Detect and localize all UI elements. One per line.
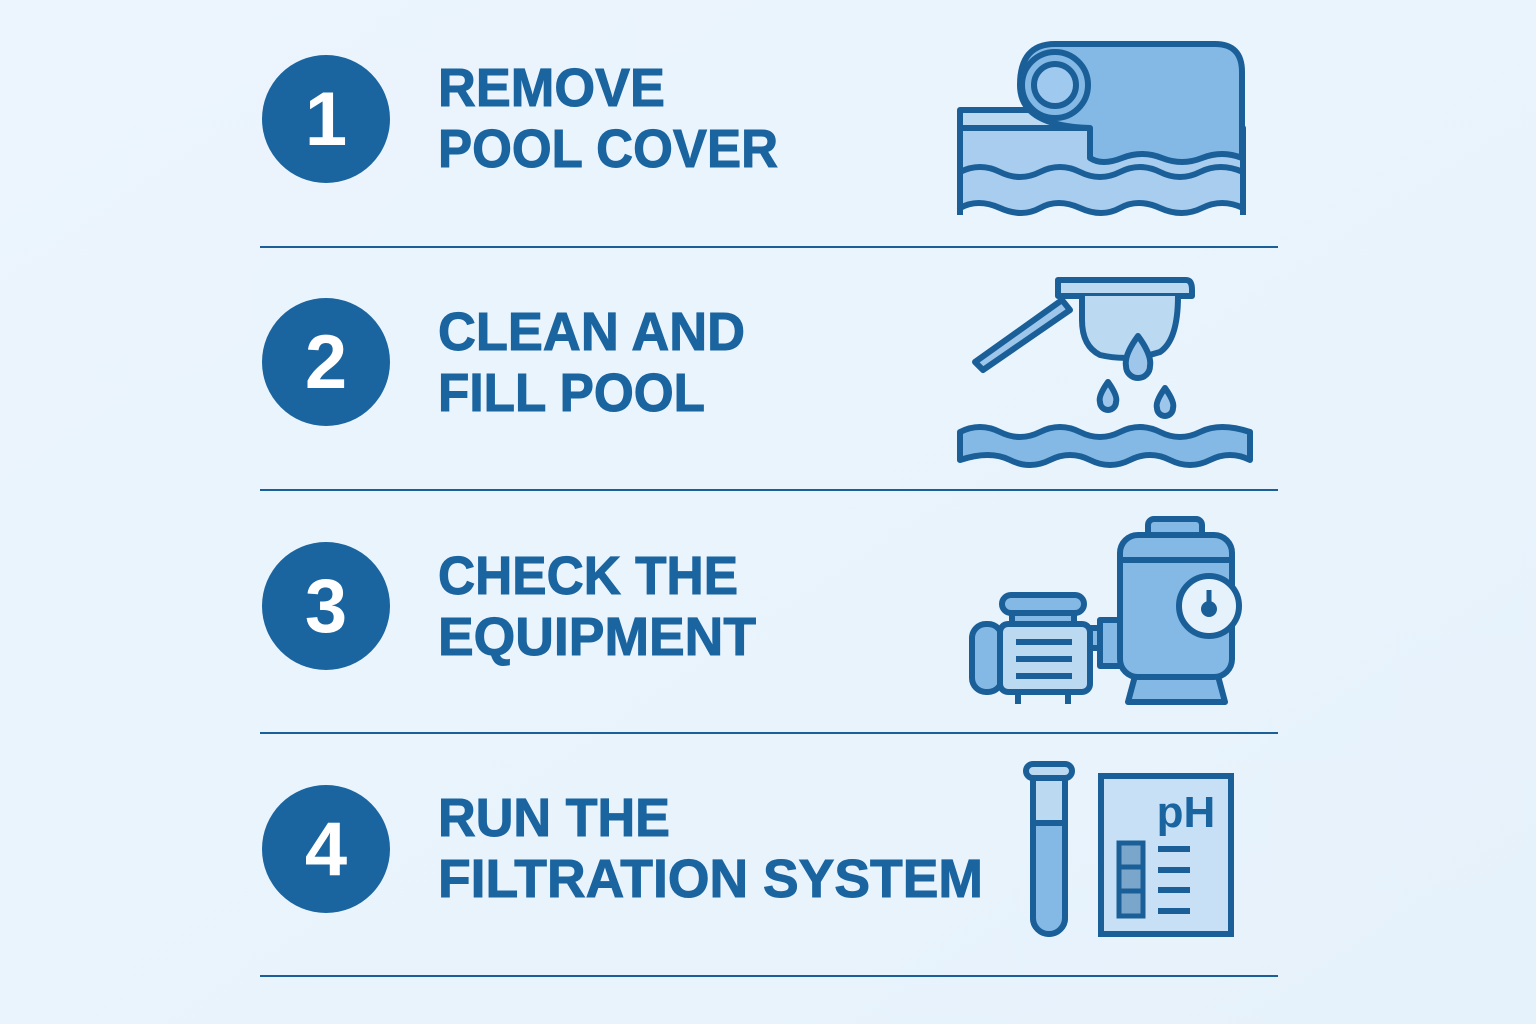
icon: skimmer net and water — [960, 280, 1250, 465]
step 3 — [262, 519, 1239, 704]
heading: remove pool cover: POOL COVER — [438, 119, 778, 179]
heading: clean and fill pool: FILL POOL — [438, 363, 705, 423]
number badge 3 — [262, 542, 390, 670]
heading: run the filtration system — [438, 788, 983, 909]
icon: pH test chart: pH — [1157, 788, 1215, 837]
number badge 3: 3 — [305, 564, 347, 649]
heading: clean and fill pool: CLEAN AND — [438, 302, 745, 362]
icon: test tube — [1026, 764, 1072, 934]
icon: pH test chart — [1101, 776, 1231, 934]
heading: remove pool cover: REMOVE — [438, 58, 665, 118]
number badge 1 — [262, 55, 390, 183]
icon: pool pump and filter — [972, 519, 1239, 704]
step 1 — [262, 44, 1243, 215]
heading: clean and fill pool — [438, 302, 745, 423]
heading: check the equipment: EQUIPMENT — [438, 607, 756, 667]
number badge 4 — [262, 785, 390, 913]
heading: check the equipment — [438, 546, 756, 667]
number badge 2 — [262, 298, 390, 426]
step 4 — [262, 764, 1231, 934]
step 2 — [262, 280, 1250, 465]
heading: run the filtration system: FILTRATION SYSTEM — [438, 849, 983, 909]
heading: check the equipment: CHECK THE — [438, 546, 738, 606]
number badge 1: 1 — [305, 77, 347, 162]
icon: pool cover roll — [960, 44, 1243, 215]
heading: remove pool cover — [438, 58, 778, 179]
heading: run the filtration system: RUN THE — [438, 788, 670, 848]
number badge 4: 4 — [305, 807, 347, 892]
number badge 2: 2 — [305, 320, 347, 405]
